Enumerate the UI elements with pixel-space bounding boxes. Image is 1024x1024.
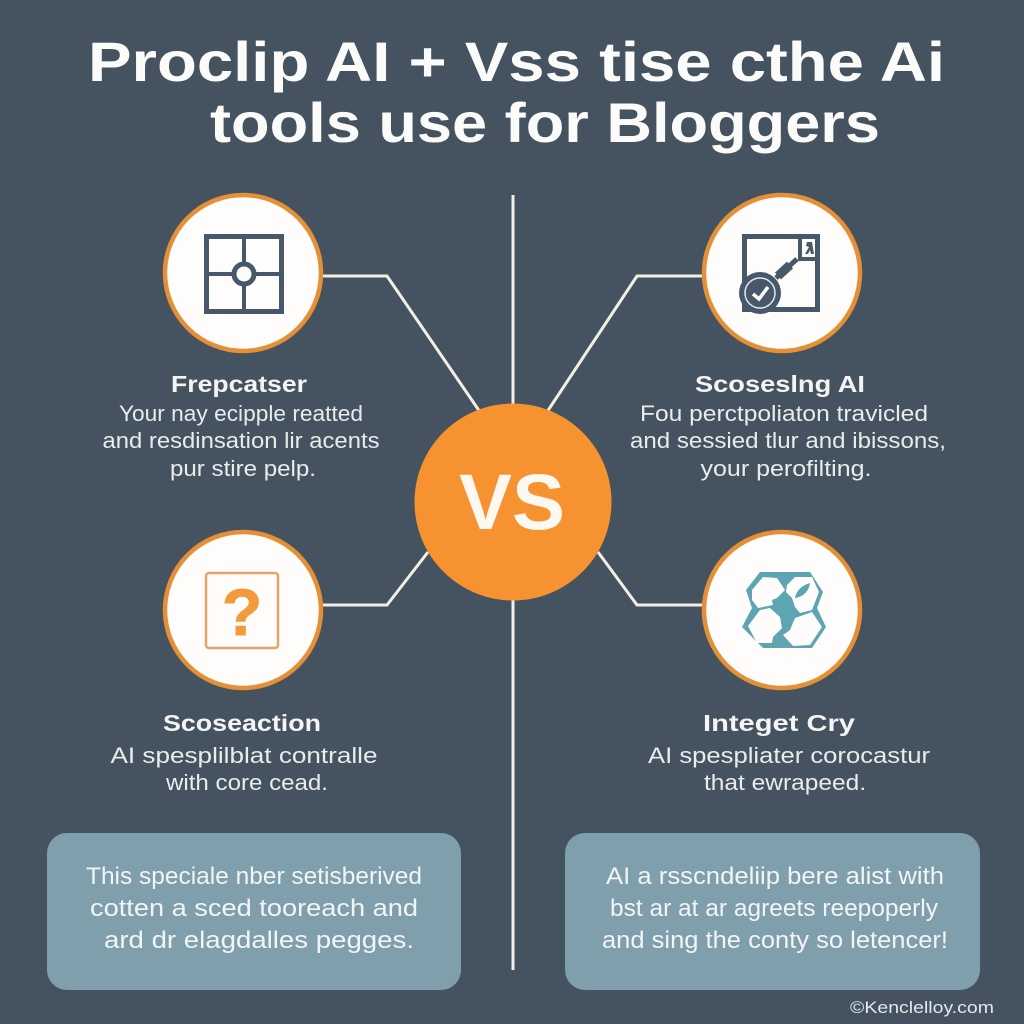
text block: top left: and resdinsation lir acents <box>102 428 380 453</box>
panel: bottom right callout: and sing the conty so letencer! <box>602 927 948 954</box>
panel: bottom left callout: ard dr elagdalles pegges. <box>104 927 414 954</box>
text block: top right: and sessied tlur and ibissons, <box>630 428 946 453</box>
title: Proclip AI + Vss tise cthe Ai <box>88 30 945 93</box>
text block: bottom right <box>648 710 930 795</box>
text block: bottom right: AI spespliater corocastur <box>648 743 930 768</box>
text block: bottom left: AI spesplilblat contralle <box>110 743 378 768</box>
title <box>88 30 945 154</box>
panel: bottom left callout <box>47 833 461 990</box>
panel: bottom right callout <box>565 833 980 990</box>
text block: bottom right: Integet Cry <box>703 710 855 736</box>
text block: top left <box>102 371 380 481</box>
icon: teal hexagon cluster <box>704 532 860 688</box>
text block: top left: pur stire pelp. <box>170 456 316 481</box>
panel: bottom right callout: AI a rsscndeliip bere alist with <box>606 863 944 890</box>
title: tools use for Bloggers <box>210 91 880 154</box>
text block: top right: Fou perctpoliaton travicled <box>640 401 928 426</box>
text block: bottom left: Scoseaction <box>163 710 321 736</box>
connector lines <box>320 276 704 605</box>
text block: top left: Frepcatser <box>171 371 307 397</box>
icon: question mark <box>165 532 321 688</box>
panel: bottom left callout: cotten a sced tooreach and <box>90 895 418 922</box>
icon: question mark: ? <box>222 575 262 649</box>
panel: bottom right callout: bst ar at ar agreets reepoperly <box>610 895 938 922</box>
text block: bottom left: with core cead. <box>165 770 328 795</box>
panel: bottom left callout: This speciale nber setisberived <box>86 863 422 890</box>
central divider line <box>512 195 514 970</box>
text block: top right: Scoseslng AI <box>695 371 865 397</box>
icon: checklist magnifier <box>704 195 860 351</box>
text block: bottom left <box>110 710 378 795</box>
text block: top left: Your nay ecipple reatted <box>119 401 363 426</box>
icon: window grid <box>165 195 321 351</box>
text block: bottom right: that ewrapeed. <box>704 770 866 795</box>
text block: top right <box>630 371 946 481</box>
VS badge: VS <box>459 457 565 546</box>
credit: ©Kenclelloy.com <box>850 998 994 1017</box>
VS badge <box>414 404 612 600</box>
text block: top right: your perofilting. <box>700 456 872 481</box>
